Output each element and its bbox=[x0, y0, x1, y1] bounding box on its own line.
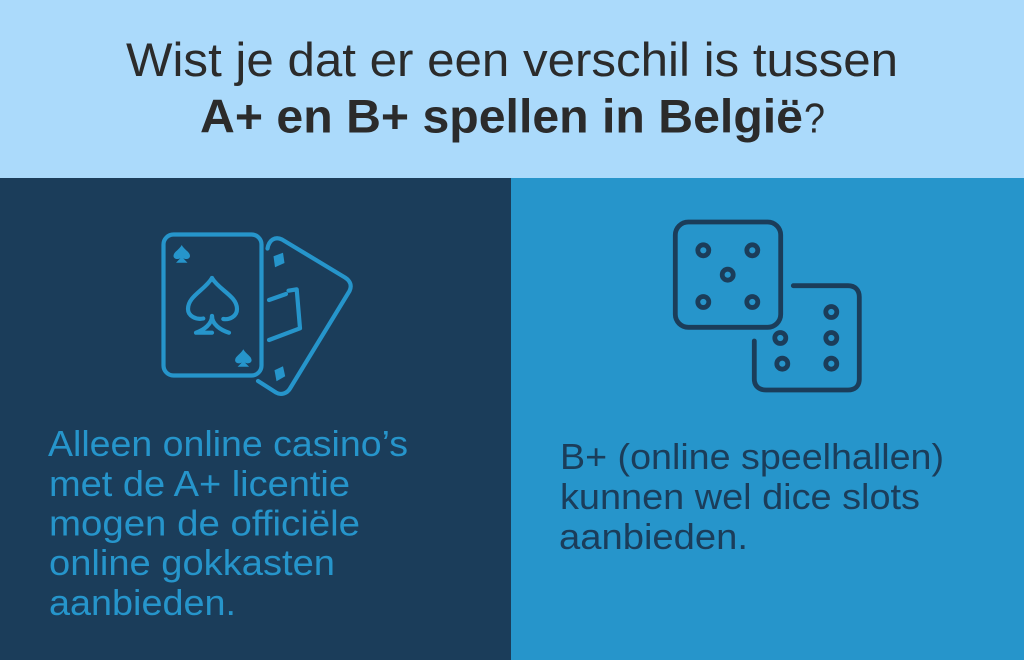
icon: dice bbox=[675, 222, 859, 390]
title bbox=[126, 33, 898, 142]
panel: left dark background bbox=[0, 178, 511, 660]
text block: A+ licence: Alleen online casino’s bbox=[48, 423, 408, 464]
text block: B+ arcades: kunnen wel dice slots bbox=[560, 476, 920, 517]
header band bbox=[0, 0, 1024, 178]
text block: B+ arcades: B+ (online speelhallen) bbox=[560, 436, 944, 477]
text block: A+ licence bbox=[48, 423, 408, 623]
text block: A+ licence: met de A+ licentie bbox=[49, 463, 350, 504]
panel: right blue background bbox=[511, 178, 1024, 660]
text block: B+ arcades bbox=[559, 436, 944, 557]
title: ? bbox=[804, 94, 825, 142]
text block: B+ arcades: aanbieden. bbox=[559, 516, 748, 557]
text block: A+ licence: aanbieden. bbox=[49, 582, 236, 623]
title: A+ en B+ spellen in België bbox=[200, 90, 803, 142]
text block: A+ licence: online gokkasten bbox=[49, 542, 335, 583]
title: Wist je dat er een verschil is tussen bbox=[126, 33, 898, 86]
icon: playing cards bbox=[164, 234, 351, 394]
text block: A+ licence: mogen de officiële bbox=[49, 502, 360, 544]
